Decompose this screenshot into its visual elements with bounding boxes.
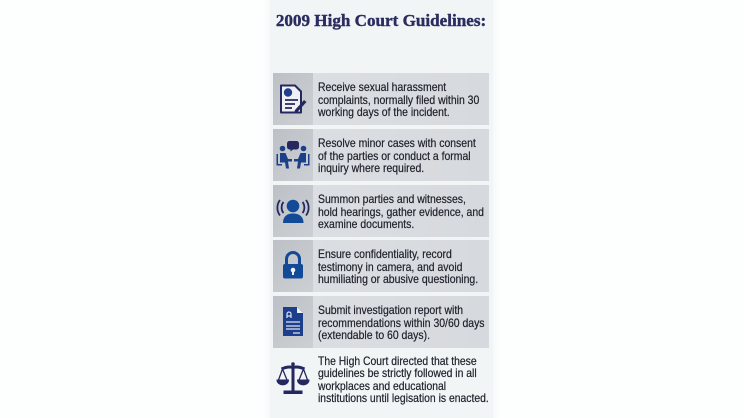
- text: hold hearings, gather evidence, and: [318, 206, 484, 218]
- text: working days of the incident.: [318, 106, 450, 119]
- closing text: [318, 355, 489, 405]
- text: Ensure confidentiality, record: [318, 248, 452, 261]
- panel: confidentiality: [273, 240, 489, 292]
- text: inquiry where required.: [318, 162, 424, 175]
- panel: submit report: [273, 296, 489, 348]
- text: of the parties or conduct a formal: [318, 150, 471, 162]
- closing text: institutions until legisation is enacted.: [318, 392, 489, 405]
- text: Receive sexual harassment: [318, 81, 446, 94]
- text: Submit investigation report with: [318, 304, 463, 317]
- icon: report document: [273, 296, 313, 348]
- text: Resolve minor cases with consent: [318, 137, 476, 150]
- text: humiliating or abusive questioning.: [318, 273, 478, 286]
- title: 2009 High Court Guidelines:: [276, 11, 486, 30]
- icon: scales of justice: [276, 362, 310, 394]
- text: Summon parties and witnesses,: [318, 193, 466, 206]
- panel: summon parties: [273, 185, 489, 237]
- closing text: The High Court directed that these: [318, 355, 477, 368]
- icon: padlock: [273, 240, 313, 292]
- text: recommendations within 30/60 days: [318, 316, 485, 330]
- text: complaints, normally filed within 30: [318, 94, 479, 106]
- panel: receive complaints: [273, 73, 489, 125]
- background panel: [270, 0, 493, 418]
- panel: resolve cases: [273, 129, 489, 181]
- text: (extendable to 60 days).: [318, 329, 430, 342]
- text: [318, 137, 476, 175]
- closing text: workplaces and educational: [318, 380, 446, 393]
- text: [318, 193, 484, 231]
- closing text: guidelines be strictly followed in all: [318, 367, 477, 380]
- text: testimony in camera, and avoid: [318, 260, 462, 274]
- text: [318, 81, 479, 119]
- text: examine documents.: [318, 218, 414, 231]
- text: [318, 248, 478, 286]
- icon: person with signal waves: [273, 185, 313, 237]
- icon: two people talking: [273, 129, 313, 181]
- text: [318, 304, 485, 342]
- icon: complaint document: [273, 73, 313, 125]
